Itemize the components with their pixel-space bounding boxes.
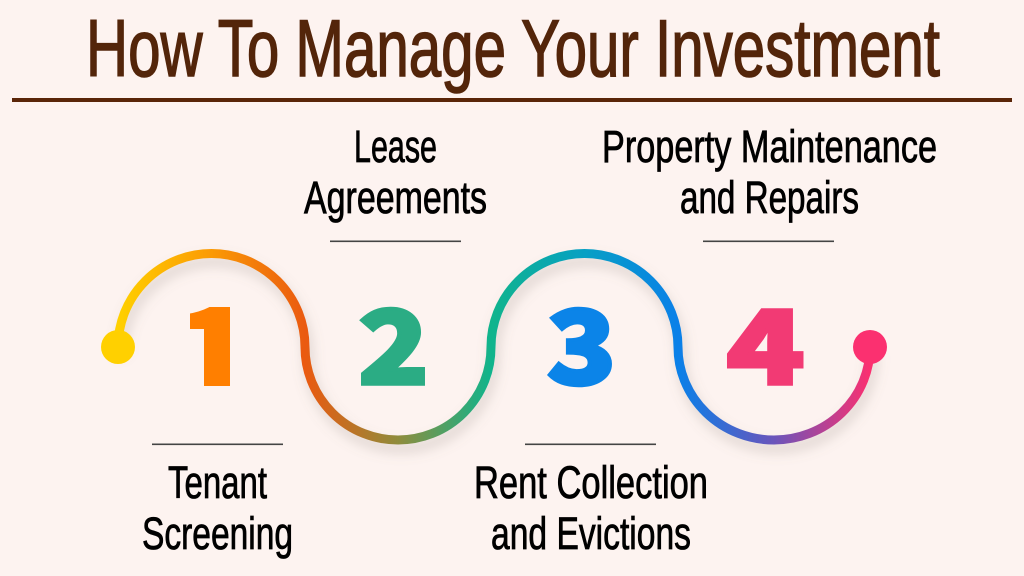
number 2: 2 (358, 266, 429, 414)
label: property maintenance and repairs: and Repairs (680, 172, 859, 223)
label: lease agreements: Lease (354, 121, 437, 172)
label: tenant screening: Tenant (168, 457, 267, 508)
label: rent collection and evictions: and Evictions (491, 508, 691, 559)
winding gradient path (118, 254, 870, 440)
label: lease agreements (304, 121, 487, 223)
start dot (101, 330, 135, 364)
label: tenant screening: Screening (142, 508, 293, 559)
divider lines (152, 240, 834, 445)
number 4: 4 (726, 266, 805, 414)
label: tenant screening (142, 457, 293, 559)
number 3: 3 (547, 266, 616, 414)
number 1: 1 (176, 266, 250, 414)
end dot (853, 330, 887, 364)
label: rent collection and evictions (474, 457, 708, 559)
label: property maintenance and repairs (602, 121, 937, 223)
label: lease agreements: Agreements (304, 172, 487, 223)
label: rent collection and evictions: Rent Collection (474, 457, 708, 508)
path shadow (121, 262, 873, 448)
title underline (12, 98, 1012, 102)
